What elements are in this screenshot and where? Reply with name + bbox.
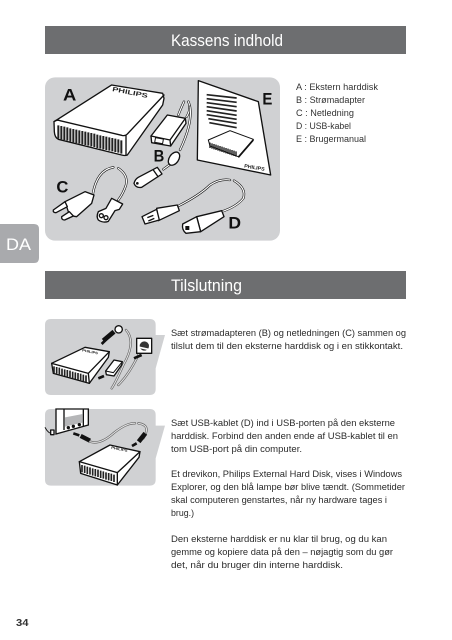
illustration: adapter and mains cable: [98, 326, 140, 388]
text: power connection: [171, 328, 406, 351]
text: USB connection: Explorer, og den blå lampe bør blive tændt. (Sommetider: [171, 482, 405, 492]
illustration: mains cable C: [53, 167, 126, 222]
text: USB connection: det, når du bruger din interne harddisk.: [171, 560, 343, 570]
legend: parts list: A : Ekstern harddisk: [296, 82, 379, 92]
illustration: hard disk A: [54, 85, 164, 155]
letter labels: C: [56, 178, 68, 197]
letter labels: A: [63, 86, 76, 105]
language tab: DA: [0, 224, 39, 263]
text: USB connection: Et drevikon, Philips External Hard Disk, vises i Windows: [171, 469, 403, 479]
illustration: USB cable: [73, 423, 147, 446]
legend: parts list: D : USB-kabel: [296, 121, 351, 131]
panel: USB connection illustration: [45, 409, 165, 486]
legend: parts list: E : Brugermanual: [296, 134, 366, 144]
letter labels: D: [228, 213, 241, 232]
letter labels: E: [262, 89, 272, 108]
text: power connection: tilslut dem til den eksterne harddisk og i en stikkontakt.: [171, 341, 403, 351]
text: USB connection: gemme og kopiere data på den – nøjagtig som du gør: [171, 547, 393, 557]
illustration: wall socket: [134, 338, 152, 358]
text: USB connection: skal computeren genstartes, når ny hardware tages i: [171, 495, 387, 505]
illustration: computer: [45, 409, 88, 435]
illustration: drive: PHILIPS: [82, 348, 99, 356]
text: USB connection: tom USB-port på din computer.: [171, 444, 302, 454]
letter labels: [56, 86, 272, 232]
text: power connection: Sæt strømadapteren (B) og netledningen (C) sammen og: [171, 328, 406, 338]
text: USB connection: [171, 418, 405, 570]
legend: parts list: [296, 82, 379, 144]
page number: 34: [16, 617, 29, 629]
illustration: drive: PHILIPS: [111, 446, 129, 453]
heading bar: Kassens indhold: [45, 26, 406, 54]
text: USB connection: brug.): [171, 508, 194, 518]
legend: parts list: C : Netledning: [296, 108, 354, 118]
heading bar: Kassens indhold: Kassens indhold: [171, 31, 283, 50]
illustration: power adapter B: [134, 102, 190, 187]
legend: parts list: B : Strømadapter: [296, 95, 365, 105]
language tab: DA: DA: [6, 235, 32, 254]
illustration: hard disk A: PHILIPS: [112, 86, 148, 100]
text: USB connection: Den eksterne harddisk er nu klar til brug, og du kan: [171, 534, 387, 544]
panel: power connection illustration: [45, 319, 165, 395]
letter labels: B: [154, 147, 164, 166]
illustration: user manual E: [197, 81, 271, 175]
illustration: USB cable D: [142, 180, 244, 233]
heading bar: Tilslutning: [45, 271, 406, 299]
illustration: user manual E: PHILIPS: [244, 163, 266, 173]
text: USB connection: Sæt USB-kablet (D) ind i USB-porten på den eksterne: [171, 418, 395, 428]
text: USB connection: harddisk. Forbind den anden ende af USB-kablet til en: [171, 431, 398, 441]
heading bar: Tilslutning: Tilslutning: [171, 276, 242, 295]
panel: box contents illustration: [45, 77, 280, 241]
